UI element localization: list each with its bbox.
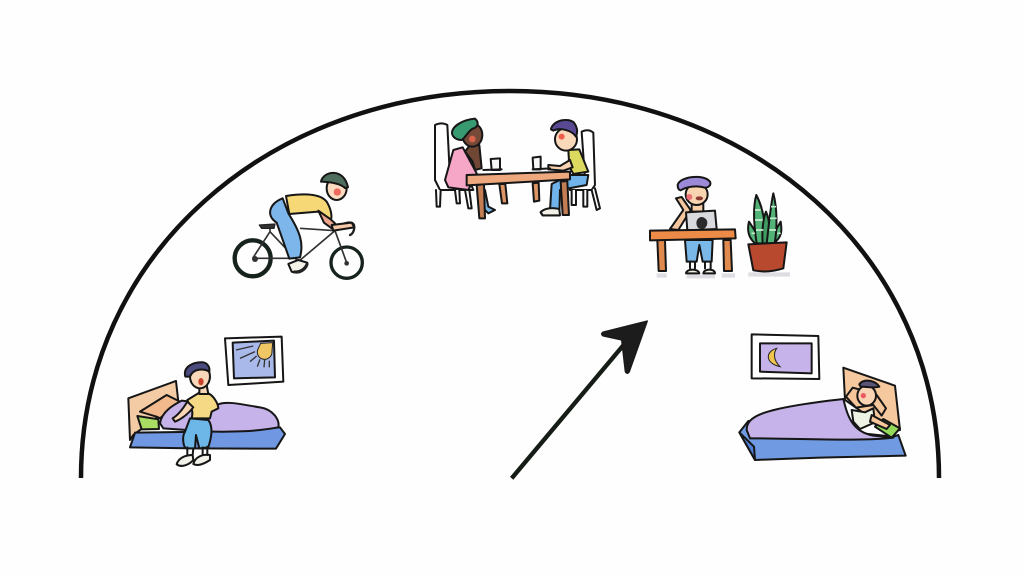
icon: potted plant [748,193,787,271]
left chair [435,123,473,208]
dial arc [81,91,939,478]
glasses and plates [483,157,550,170]
right chair [570,130,600,210]
bicycle [235,223,362,278]
woman [445,119,495,213]
scene: reading in bed at night [739,334,906,460]
man [541,120,588,215]
arrow: clock hand [512,321,647,478]
desk [650,229,736,271]
bed [128,381,285,449]
scene: cycling [235,173,362,278]
icon: window with sun [225,337,283,385]
scene: dinner at table [435,119,600,218]
person reading [846,381,900,438]
bed [739,368,906,460]
shadows [657,272,790,278]
icon: window with moon [752,334,819,379]
table [467,172,570,218]
person sitting up [173,362,218,466]
blanket [747,399,893,440]
cyclist [270,173,354,273]
scene: working at laptop [650,177,790,278]
scene: waking up in bed [128,337,285,466]
person at desk [670,177,715,273]
laptop [686,211,717,230]
book [852,408,890,429]
